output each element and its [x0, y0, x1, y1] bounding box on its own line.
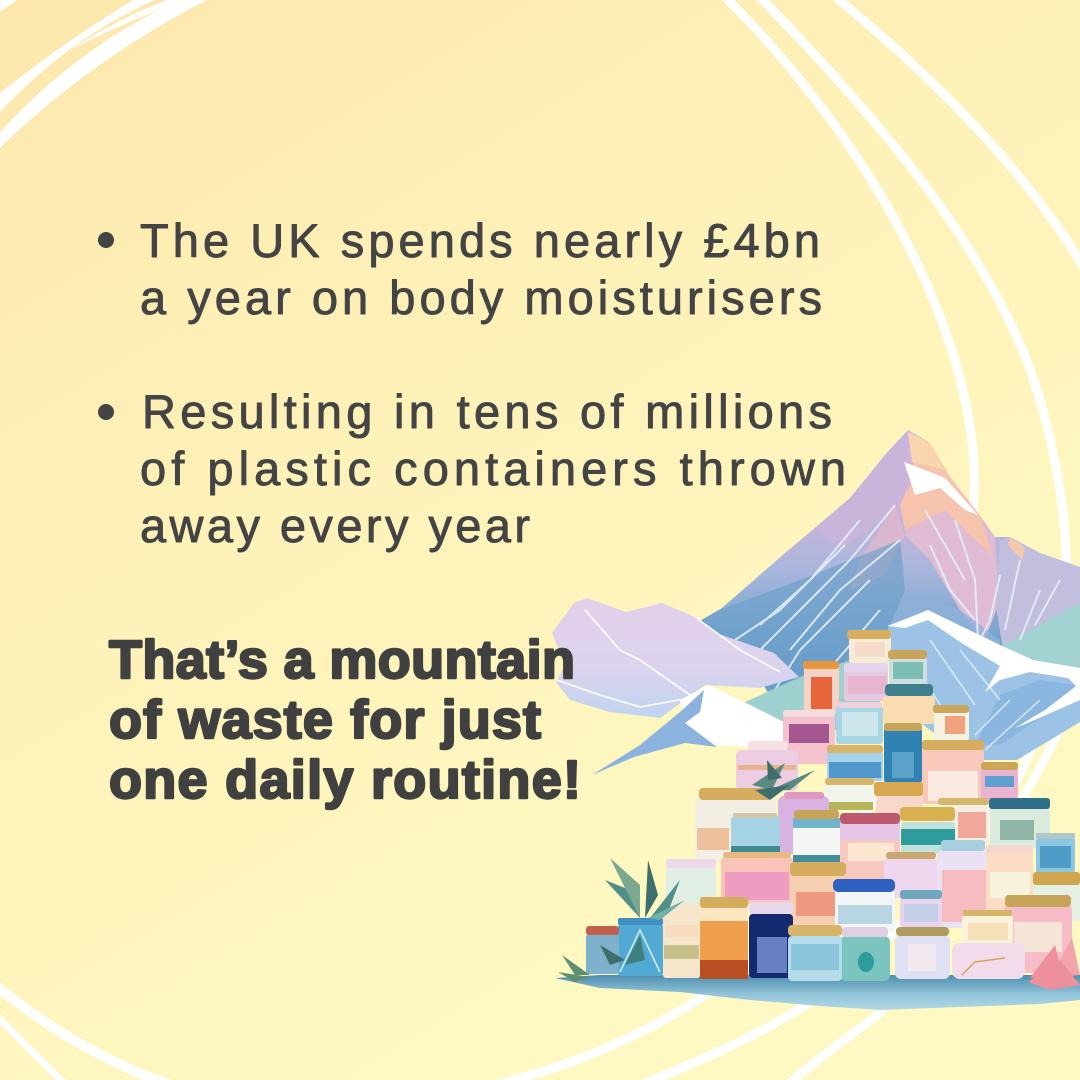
teal foothill [743, 650, 880, 730]
jar [840, 927, 890, 981]
heading: conclusion statement: one daily routine! [109, 750, 581, 810]
jar [933, 705, 969, 741]
jar [825, 778, 874, 811]
jar [586, 926, 619, 974]
jar [700, 897, 748, 979]
jar [883, 684, 935, 724]
jar [952, 943, 1025, 979]
jar [986, 845, 1033, 911]
jar [900, 890, 942, 928]
plant [752, 760, 815, 800]
illustration: shelf [555, 975, 1080, 1010]
small blue ridge [592, 690, 717, 775]
jar [989, 798, 1050, 848]
jar [844, 663, 888, 701]
jar [1004, 895, 1072, 973]
jar [847, 630, 891, 664]
jar [836, 702, 883, 744]
jar [1036, 833, 1075, 873]
jar [884, 723, 922, 783]
lotus flower [1028, 938, 1080, 990]
heading: conclusion statement: That’s a mountain [109, 630, 575, 690]
jar [793, 810, 840, 863]
main mountain [698, 430, 1080, 740]
jar [962, 910, 1013, 944]
bullet list [98, 214, 846, 552]
jar [803, 661, 839, 713]
heading: conclusion statement: of waste for just [109, 690, 541, 750]
jar [981, 762, 1018, 799]
jar [788, 925, 842, 981]
bullet point 1 [98, 214, 822, 324]
white snow field [680, 685, 790, 748]
bullet point 2: away every year [140, 499, 530, 552]
illustration: mountains [552, 430, 1080, 775]
jar [663, 903, 700, 978]
jar [833, 879, 895, 931]
plant in pot [605, 858, 685, 965]
bullet point 2: Resulting in tens of millions [142, 385, 832, 438]
jar [938, 798, 989, 844]
jar [900, 807, 955, 854]
jar [874, 782, 923, 818]
jar [618, 918, 663, 976]
jar [721, 852, 793, 904]
jar [884, 852, 937, 898]
bullet point 2 [98, 385, 846, 552]
left lavender mountain [552, 598, 799, 718]
jar [736, 741, 798, 791]
jar [666, 859, 716, 904]
jar [695, 788, 776, 861]
jar [895, 927, 950, 979]
jar [790, 862, 846, 928]
right blue foothill [888, 610, 1080, 760]
jar [937, 840, 989, 928]
jar [731, 813, 780, 852]
bullet point 2: of plastic containers thrown [140, 442, 846, 495]
jar [827, 745, 883, 781]
bullet point 1: a year on body moisturisers [140, 271, 822, 324]
jar [922, 740, 984, 804]
jar [840, 813, 900, 881]
heading: conclusion statement [109, 630, 581, 810]
jar [1033, 872, 1080, 921]
illustration: stack of jars [558, 630, 1080, 990]
small fern [558, 945, 625, 982]
jar [749, 902, 793, 978]
jar [778, 792, 829, 854]
bullet point 1: The UK spends nearly £4bn [140, 214, 820, 267]
jar [888, 650, 927, 684]
jar [783, 710, 835, 764]
